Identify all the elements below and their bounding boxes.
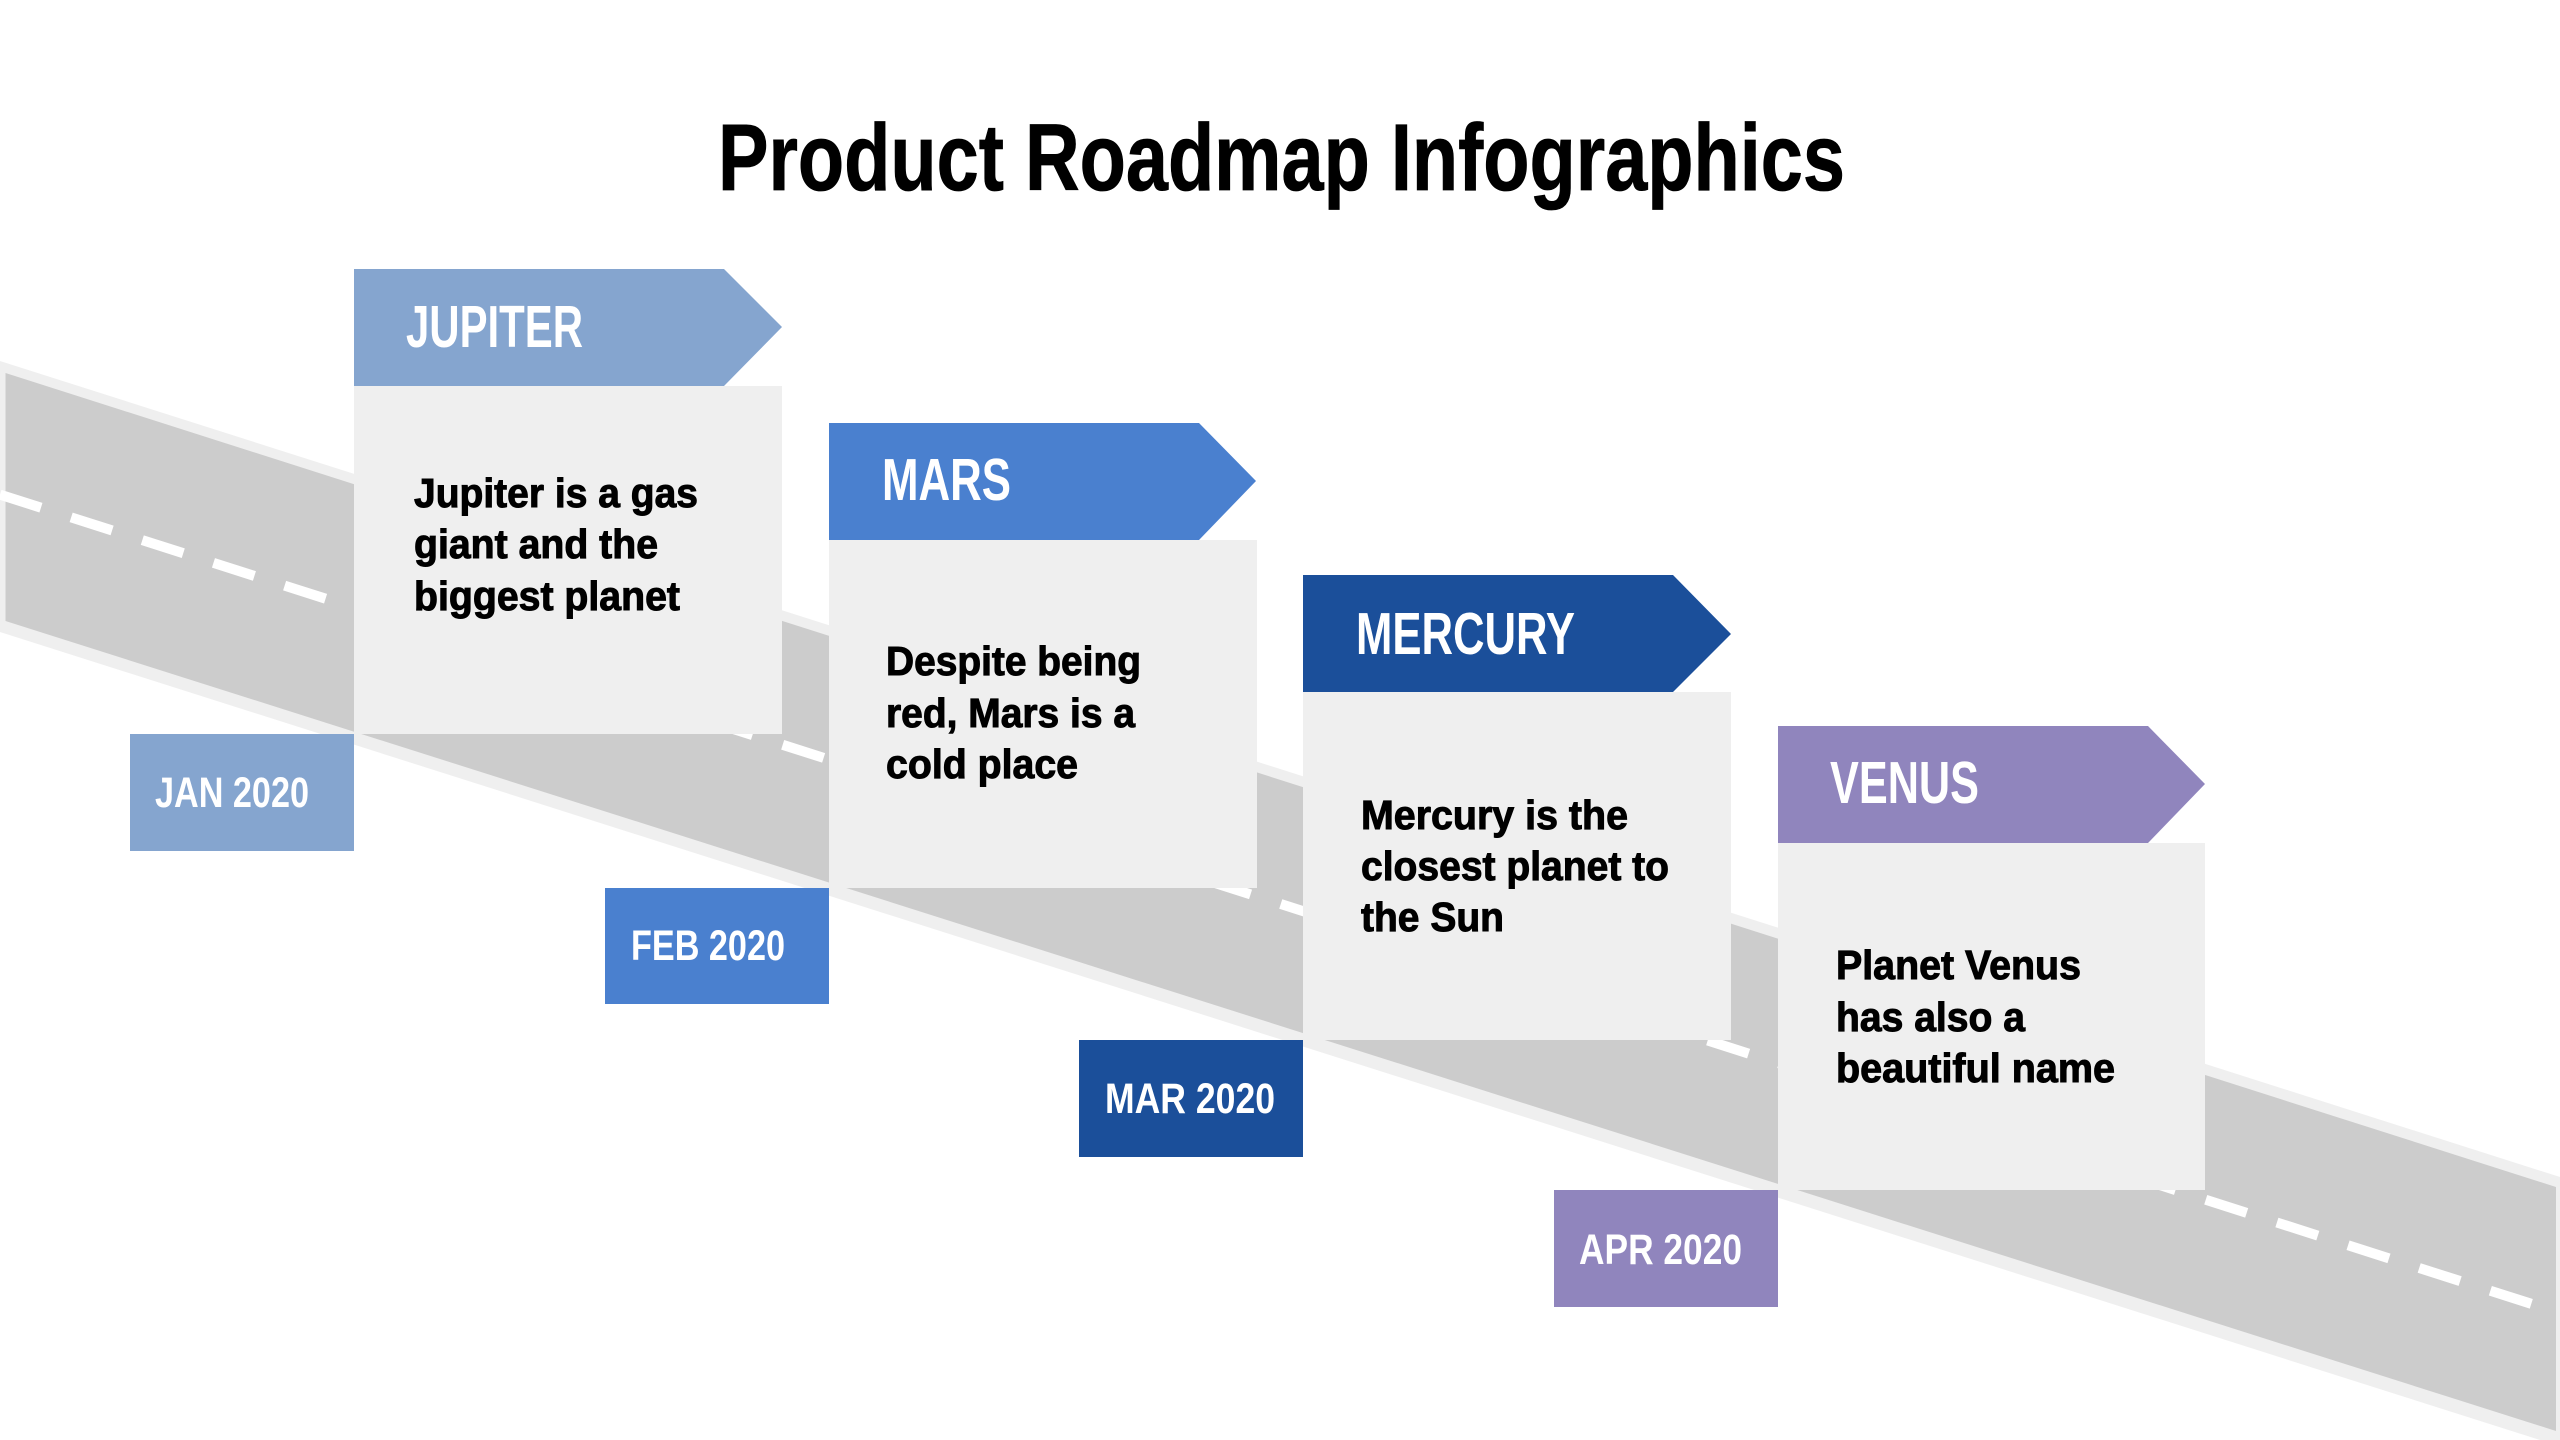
date tag: Feb 2020	[605, 888, 829, 1004]
heading: Jupiter: JUPITER	[406, 294, 583, 360]
text: Mars description	[886, 638, 1141, 787]
text: Mercury description: closest planet to	[1361, 843, 1669, 889]
panel: Mercury	[1079, 575, 1731, 1157]
panel: Mars	[605, 423, 1257, 1004]
card: Venus description	[1778, 843, 2205, 1190]
date label: Feb 2020: FEB 2020	[631, 922, 785, 970]
text: Mars description: red, Mars is a	[886, 690, 1136, 736]
heading: Venus: VENUS	[1830, 750, 1979, 816]
text: Mars description: cold place	[886, 741, 1078, 787]
panel: Venus	[1554, 726, 2205, 1307]
text: Venus description: beautiful name	[1836, 1045, 2115, 1091]
text: Venus description	[1836, 942, 2115, 1091]
text: Jupiter description	[414, 470, 698, 619]
date tag: Mar 2020	[1079, 1040, 1303, 1157]
panel: Jupiter	[130, 269, 782, 851]
card: Mercury description	[1303, 692, 1731, 1040]
arrow header: Venus	[1778, 726, 2205, 843]
title: Product Roadmap Infographics	[718, 105, 1845, 211]
date label: Jan 2020: JAN 2020	[155, 769, 309, 817]
text: Mercury description: Mercury is the	[1361, 792, 1628, 838]
text: Venus description: Planet Venus	[1836, 942, 2081, 988]
arrow header: Mercury	[1303, 575, 1731, 692]
card: Mars description	[829, 540, 1257, 888]
arrow header: Jupiter	[354, 269, 782, 386]
text: Mercury description	[1361, 792, 1669, 940]
text: Venus description: has also a	[1836, 994, 2026, 1040]
text: Mars description: Despite being	[886, 638, 1141, 684]
text: Mercury description: the Sun	[1361, 894, 1504, 940]
card: Jupiter description	[354, 386, 782, 734]
arrow header: Mars	[829, 423, 1256, 540]
heading: Mars: MARS	[882, 447, 1011, 513]
text: Jupiter description: Jupiter is a gas	[414, 470, 698, 516]
road	[0, 361, 2560, 1440]
date tag: Jan 2020	[130, 734, 354, 851]
date label: Mar 2020: MAR 2020	[1105, 1075, 1275, 1123]
text: Jupiter description: giant and the	[414, 521, 658, 567]
date label: Apr 2020: APR 2020	[1579, 1226, 1742, 1274]
heading: Mercury: MERCURY	[1356, 601, 1575, 667]
text: Jupiter description: biggest planet	[414, 573, 680, 619]
date tag: Apr 2020	[1554, 1190, 1778, 1307]
